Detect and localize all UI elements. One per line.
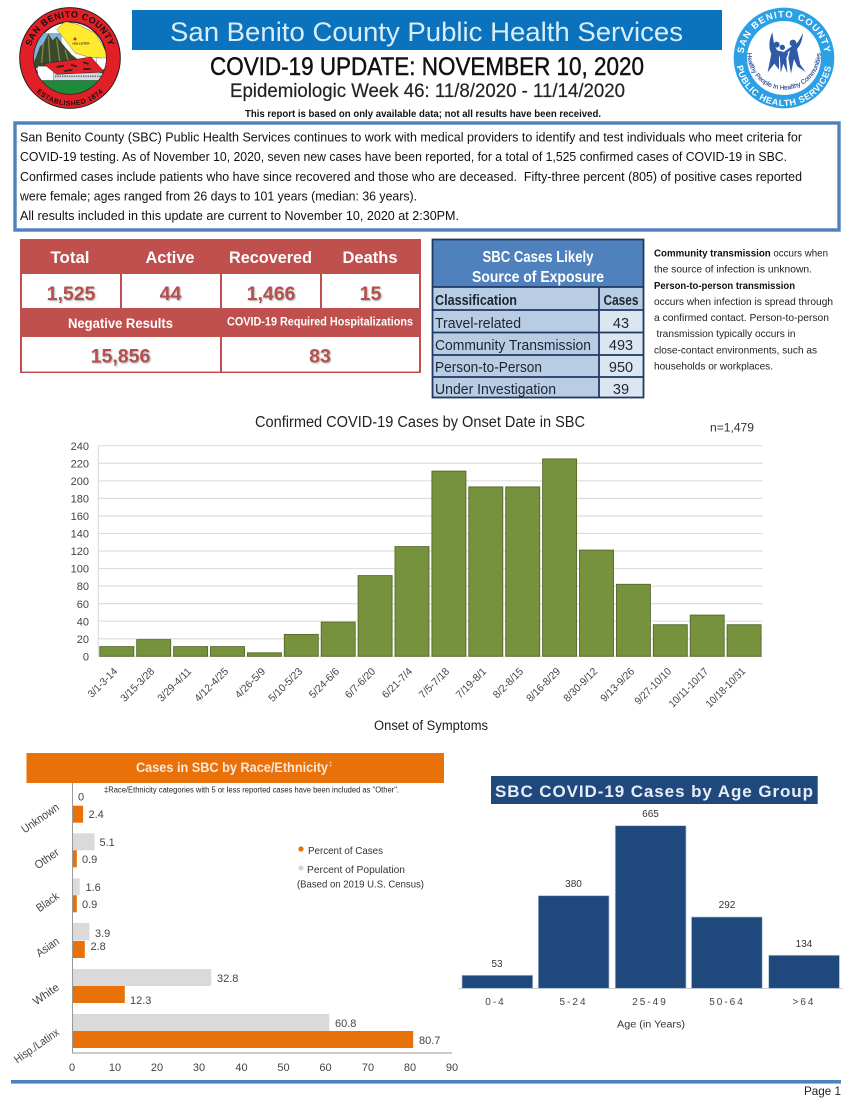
bar chart: race/ethnicity: 3.9 (95, 928, 110, 940)
bar chart: cases by onset date: 200 (71, 476, 89, 488)
transmission definitions text: a confirmed contact. Person-to-person (654, 312, 829, 324)
panel: case totals table: Deaths (342, 248, 398, 267)
bar chart: cases by onset date: 4/26-5/9 (233, 666, 268, 701)
bar chart: cases by onset date: 8/2-8/15 (491, 666, 526, 701)
panel: likely source of exposure table: Under Investigation (435, 382, 556, 398)
panel: case totals table: Active (146, 248, 194, 267)
bar chart: race/ethnicity: 50 (277, 1062, 290, 1074)
bar chart: race/ethnicity: 10 (109, 1062, 121, 1074)
panel: likely source of exposure table: 43 (613, 316, 629, 332)
bar chart: cases by onset date: 10/11-10/17 (667, 666, 711, 710)
bar chart: cases by onset date: 9/13-9/26 (598, 666, 637, 705)
title banner (132, 10, 722, 50)
bar chart: age group: 665 (642, 809, 659, 820)
panel: case totals table: 15 (360, 283, 381, 305)
bar chart: age group: 5-24 (559, 997, 588, 1008)
transmission definitions text: occurs when infection is spread through (654, 296, 833, 308)
bar chart: cases by onset date: 80 (77, 581, 89, 593)
bar chart: race/ethnicity: 5.1 (100, 837, 115, 849)
bar chart: race/ethnicity: 2.4 (88, 809, 104, 821)
panel: intro summary: Confirmed cases include patients who have since recovered and those who are deceased. Fifty-three percent (805) of positive cases reported (20, 169, 802, 184)
bar chart: race/ethnicity: 60.8 (335, 1018, 356, 1030)
x-axis title: onset of symptoms: Onset of Symptoms (374, 718, 488, 733)
panel: case totals table: COVID-19 Required Hospitalizations (227, 316, 413, 328)
public health services logo (734, 8, 834, 108)
public health services logo: Healthy People In Healthy Communities (747, 53, 821, 90)
race/ethnicity legend: Percent of Population (307, 864, 405, 876)
bar chart: race/ethnicity: 80.7 (419, 1035, 440, 1047)
bar chart: cases by onset date: 10/18-10/31 (704, 666, 748, 710)
bar chart: cases by onset date: 5/24-6/6 (307, 666, 342, 701)
panel: intro summary: All results included in this update are current to November 10, 2020 at 2:30PM. (20, 208, 459, 223)
bar chart: age group (458, 809, 843, 1008)
race/ethnicity heading (26, 753, 444, 783)
bar chart: race/ethnicity: Other (33, 847, 62, 872)
bottom rule (11, 1080, 841, 1084)
x-axis title: age in years: Age (in Years) (617, 1018, 685, 1030)
bar chart: cases by onset date: 8/16-8/29 (524, 666, 563, 705)
bar chart: age group: 0-4 (485, 997, 506, 1008)
panel: intro summary: San Benito County (SBC) Public Health Services continues to work with medical providers to identify and test individuals who meet criteria for (20, 130, 803, 144)
bar chart: age group: >64 (793, 997, 815, 1008)
bar chart: race/ethnicity: White (31, 982, 62, 1008)
panel: likely source of exposure table: SBC Cases Likely (482, 249, 594, 266)
title banner: San Benito County Public Health Services (170, 17, 683, 47)
transmission definitions text (654, 248, 833, 372)
bar chart: age group: 292 (719, 900, 736, 911)
transmission definitions text: households or workplaces. (654, 360, 773, 372)
panel: case totals table: 1,466 (247, 283, 296, 305)
bar chart: race/ethnicity: 2.8 (90, 941, 106, 953)
county seal logo (19, 7, 121, 109)
bar chart: race/ethnicity: Hisp./Latinx (12, 1027, 62, 1066)
panel: case totals table: 44 (160, 283, 181, 305)
public health services logo: SAN BENITO COUNTY (738, 10, 831, 54)
bar chart: cases by onset date: 7/5-7/18 (417, 666, 452, 701)
transmission definitions text: transmission typically occurs in (656, 328, 796, 340)
bar chart: cases by onset date: 180 (71, 494, 89, 506)
bar chart: race/ethnicity: 40 (235, 1062, 248, 1074)
race/ethnicity legend (297, 845, 424, 890)
panel: likely source of exposure table: Travel-related (435, 316, 521, 332)
county seal logo: SAN BENITO COUNTY (26, 11, 115, 46)
bar chart: race/ethnicity: 1.6 (86, 882, 101, 894)
race/ethnicity legend: Percent of Cases (308, 845, 383, 857)
bar chart: race/ethnicity: 70 (362, 1062, 374, 1074)
bar chart: race/ethnicity: 60 (319, 1062, 332, 1074)
bar chart: race/ethnicity: 0 (78, 792, 84, 804)
bar chart: race/ethnicity: 30 (193, 1062, 205, 1074)
transmission definitions text: close-contact environments, such as (654, 344, 817, 356)
panel: likely source of exposure table: Source of Exposure (472, 269, 604, 286)
panel: likely source of exposure table: Classification (435, 293, 517, 309)
panel: case totals table: Recovered (229, 248, 312, 267)
chart title: onset date: Confirmed COVID-19 Cases by Onset Date in SBC (255, 414, 585, 431)
bar chart: cases by onset date: 120 (71, 546, 89, 558)
panel: intro summary: COVID-19 testing. As of November 10, 2020, seven new cases have been reported, for a total of 1,525 confirmed cases of COVID-19 in SBC. (20, 149, 787, 164)
page number: Page 1 (804, 1084, 841, 1098)
bar chart: cases by onset date: 3/1-3-14 (85, 666, 120, 700)
panel: intro summary (15, 123, 839, 230)
bar chart: cases by onset date: 8/30-9/12 (561, 666, 600, 705)
panel: case totals table: 15,856 (91, 346, 150, 368)
race/ethnicity heading: Cases in SBC by Race/Ethnicity (136, 759, 328, 775)
bar chart: cases by onset date: 220 (71, 458, 89, 470)
bar chart: cases by onset date: 4/12-4/25 (192, 666, 231, 705)
bar chart: race/ethnicity: 0.9 (82, 899, 97, 911)
county seal logo: ESTABLISHED 1874 (36, 88, 103, 106)
panel: likely source of exposure table (432, 240, 644, 398)
bar chart: race/ethnicity (12, 783, 458, 1074)
update heading: COVID-19 UPDATE: NOVEMBER 10, 2020 (210, 53, 644, 81)
bar chart: race/ethnicity: 90 (446, 1062, 458, 1074)
bar chart: cases by onset date: 140 (71, 528, 89, 540)
bar chart: age group: 380 (565, 879, 582, 890)
bar chart: cases by onset date: 0 (83, 652, 89, 664)
bar chart: cases by onset date: 3/15-3/28 (118, 666, 157, 705)
bar chart: race/ethnicity: 12.3 (130, 995, 151, 1007)
panel: case totals table: Negative Results (68, 316, 173, 331)
race/ethnicity legend: (Based on 2019 U.S. Census) (297, 878, 424, 890)
county seal logo: HOLLISTER (73, 41, 90, 45)
epidemiologic week subheading: Epidemiologic Week 46: 11/8/2020 - 11/14/2020 (230, 80, 625, 102)
bar chart: cases by onset date: 20 (77, 634, 89, 646)
bar chart: cases by onset date: 3/29-4/11 (155, 666, 194, 705)
race/ethnicity footnote: ‡Race/Ethnicity categories with 5 or less reported cases have been included as "Other". (104, 786, 399, 794)
panel: likely source of exposure table: 950 (609, 360, 633, 376)
public health services logo: PUBLIC HEALTH SERVICES (736, 65, 831, 106)
panel: likely source of exposure table: Cases (604, 293, 638, 309)
bar chart: cases by onset date: 40 (77, 616, 89, 628)
bar chart: race/ethnicity: 20 (151, 1062, 163, 1074)
bar chart: age group: 25-49 (632, 997, 668, 1008)
bar chart: cases by onset date: 9/27-10/10 (632, 666, 674, 707)
race/ethnicity heading: ‡ (329, 762, 332, 768)
bar chart: race/ethnicity: 80 (404, 1062, 416, 1074)
bar chart: cases by onset date: 240 (71, 441, 89, 453)
bar chart: cases by onset date (71, 441, 763, 710)
bar chart: race/ethnicity: Black (34, 891, 62, 915)
bar chart: cases by onset date: 160 (71, 511, 89, 523)
bar chart: cases by onset date: 6/21-7/4 (380, 666, 415, 701)
panel: likely source of exposure table: Person-to-Person (435, 360, 542, 376)
age group heading: SBC COVID-19 Cases by Age Group (495, 782, 813, 801)
bar chart: race/ethnicity: 0.9 (82, 854, 97, 866)
sample size note: n=1,479 (710, 420, 754, 434)
bar chart: age group: 50-64 (709, 997, 745, 1008)
bar chart: cases by onset date: 7/19-8/1 (454, 666, 489, 701)
bar chart: race/ethnicity: 0 (69, 1062, 75, 1074)
bar chart: cases by onset date: 100 (71, 564, 89, 576)
data disclaimer: This report is based on only available data; not all results have been received. (245, 108, 601, 120)
panel: case totals table (20, 239, 421, 373)
panel: likely source of exposure table: Community Transmission (435, 338, 591, 354)
bar chart: race/ethnicity: Unknown (20, 802, 62, 836)
panel: likely source of exposure table: 39 (613, 382, 629, 398)
bar chart: age group: 53 (491, 959, 503, 970)
bar chart: cases by onset date: 6/7-6/20 (343, 666, 378, 701)
panel: case totals table: 1,525 (47, 283, 96, 305)
panel: intro summary: were female; ages ranged from 26 days to 101 years (median: 36 years). (19, 188, 417, 204)
panel: case totals table: Total (50, 248, 90, 267)
bar chart: race/ethnicity: Asian (34, 936, 62, 960)
transmission definitions text: the source of infection is unknown. (654, 264, 812, 276)
bar chart: age group: 134 (796, 939, 813, 950)
transmission definitions text: Person-to-person transmission (654, 280, 795, 292)
panel: likely source of exposure table: 493 (609, 338, 633, 354)
panel: case totals table: 83 (309, 346, 331, 368)
age group heading (491, 776, 818, 804)
bar chart: cases by onset date: 60 (77, 599, 89, 611)
transmission definitions text: Community transmission occurs when (654, 248, 828, 260)
bar chart: cases by onset date: 5/10-5/23 (266, 666, 305, 705)
bar chart: race/ethnicity: 32.8 (217, 973, 238, 985)
